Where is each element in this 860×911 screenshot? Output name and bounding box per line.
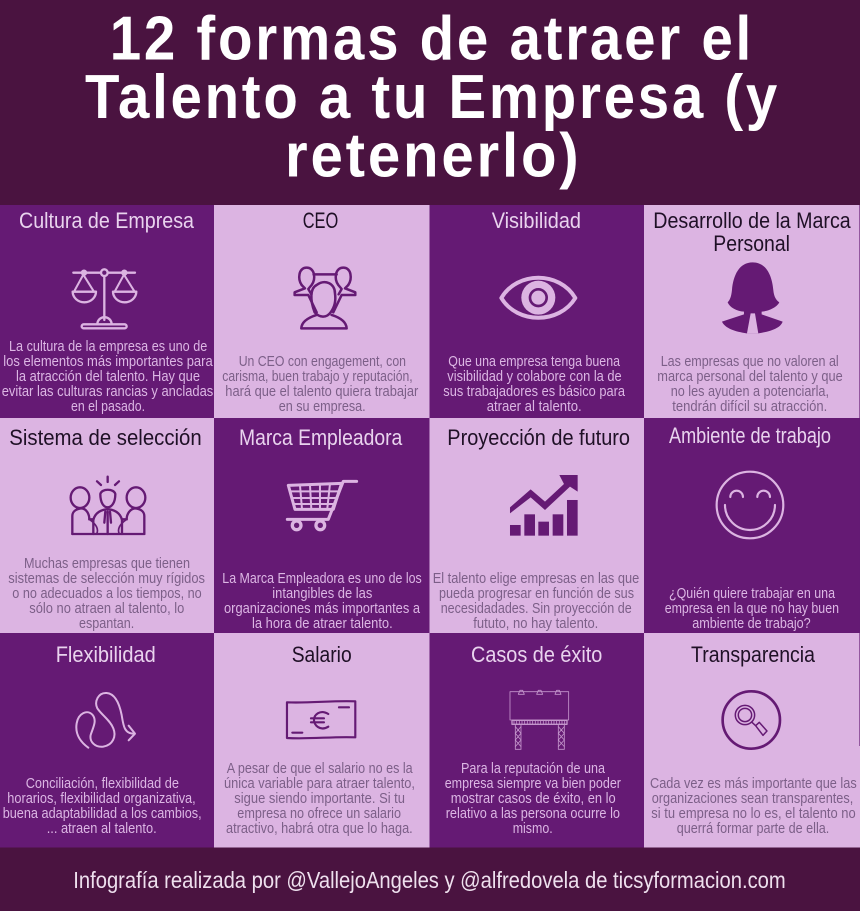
panel: Salario bbox=[214, 633, 430, 848]
icon: euro banknote bbox=[287, 701, 355, 738]
panel: Transparencia bbox=[644, 633, 860, 848]
panel: Ambiente de trabajo bbox=[644, 418, 860, 633]
body text: o no adecuados a los tiempos, no bbox=[12, 585, 202, 602]
heading: Proyección de futuro bbox=[447, 425, 630, 450]
body text: no les ayuden a potenciarla, bbox=[671, 383, 829, 400]
body text: El talento elige empresas en las que bbox=[433, 570, 639, 587]
body text bbox=[657, 353, 843, 415]
heading bbox=[653, 208, 851, 256]
body text: sistemas de selección muy rígidos bbox=[8, 570, 205, 587]
body text bbox=[8, 555, 205, 632]
heading: Personal bbox=[713, 231, 790, 256]
body text: intangibles de las bbox=[272, 585, 372, 602]
icon: billboard bbox=[510, 690, 569, 749]
body text bbox=[222, 353, 418, 415]
heading: Salario bbox=[292, 642, 352, 667]
body text: empresa siempre va bien poder bbox=[445, 775, 621, 792]
body text bbox=[443, 353, 626, 415]
title: 12 formas de atraer el bbox=[110, 4, 754, 74]
panel: Proyección de futuro bbox=[430, 418, 644, 633]
body text: Que una empresa tenga buena bbox=[448, 353, 621, 370]
body text: la atracción del talento. Hay que bbox=[16, 368, 200, 385]
panel: Sistema de selección bbox=[0, 418, 214, 633]
body text: mostrar casos de éxito, en lo bbox=[451, 790, 616, 807]
heading: Sistema de selección bbox=[9, 425, 202, 450]
body text: La Marca Empleadora es uno de los bbox=[222, 570, 422, 587]
body text: Un CEO con engagement, con bbox=[239, 353, 406, 370]
icon: eye bbox=[501, 278, 575, 318]
title: Talento a tu Empresa (y bbox=[85, 63, 780, 132]
icon: magnifier in circle bbox=[723, 691, 780, 749]
body text: hará que el talento quiera trabajar bbox=[225, 383, 418, 400]
icon: woman silhouette bbox=[722, 262, 783, 333]
body text: ambiente de trabajo? bbox=[692, 615, 811, 632]
heading: Marca Empleadora bbox=[239, 425, 403, 450]
icon: shopping cart bbox=[287, 481, 357, 530]
body text: sigue siendo importante. Si tu bbox=[234, 790, 405, 807]
icon: selection team bbox=[71, 477, 145, 534]
panel: Marca Empleadora bbox=[214, 418, 430, 633]
body text bbox=[665, 585, 839, 632]
title bbox=[85, 4, 780, 191]
body text bbox=[650, 775, 857, 837]
body text: mismo. bbox=[513, 820, 553, 837]
body text bbox=[222, 570, 422, 632]
heading: CEO bbox=[303, 208, 338, 233]
body text: visibilidad y colabore con la de bbox=[447, 368, 622, 385]
body text bbox=[224, 760, 415, 837]
body text: Para la reputación de una bbox=[461, 760, 606, 777]
heading: Flexibilidad bbox=[56, 642, 156, 667]
body text: los elementos más importantes para bbox=[3, 353, 213, 370]
body text: sólo no atraen al talento, lo bbox=[29, 600, 184, 617]
heading: Ambiente de trabajo bbox=[669, 423, 831, 448]
body text: relativo a las persona ocurre lo bbox=[446, 805, 620, 822]
body text: carisma, buen trabajo y reputación, bbox=[222, 368, 413, 385]
panel: Cultura de Empresa bbox=[0, 205, 214, 418]
body text: en su empresa. bbox=[279, 398, 366, 415]
body text: necesidadades. Sin proyección de bbox=[441, 600, 632, 617]
body text: la hora de atraer talento. bbox=[252, 615, 393, 632]
body text: fututo, no hay talento. bbox=[473, 615, 598, 632]
panel: Visibilidad bbox=[430, 205, 644, 418]
heading: Transparencia bbox=[691, 642, 816, 667]
body text: organizaciones más importantes a bbox=[224, 600, 421, 617]
body text: ... atraen al talento. bbox=[47, 820, 157, 837]
icon: growth chart bbox=[510, 475, 578, 536]
body text: querrá formar parte de ella. bbox=[677, 820, 829, 837]
body text: sus trabajadores es básico para bbox=[443, 383, 626, 400]
title: retenerlo) bbox=[285, 122, 582, 191]
body text: Muchas empresas que tienen bbox=[24, 555, 190, 572]
body text: pueda progresar en función de sus bbox=[439, 585, 634, 602]
body text bbox=[3, 775, 202, 837]
panel: CEO bbox=[214, 205, 430, 418]
icon: smiley bbox=[717, 472, 783, 538]
body text: La cultura de la empresa es uno de bbox=[9, 338, 207, 355]
body text bbox=[2, 338, 213, 415]
icon: scales bbox=[73, 269, 136, 328]
body text: buena adaptabilidad a los cambios, bbox=[3, 805, 202, 822]
body text: A pesar de que el salario no es la bbox=[227, 760, 413, 777]
panel: Casos de éxito bbox=[430, 633, 644, 848]
panel: Desarrollo de la Marca Personal bbox=[644, 205, 860, 418]
heading: Cultura de Empresa bbox=[19, 208, 195, 233]
body text: Conciliación, flexibilidad de bbox=[26, 775, 179, 792]
body text bbox=[433, 570, 639, 632]
body text: atraer al talento. bbox=[487, 398, 582, 415]
body text bbox=[445, 760, 621, 837]
body text: empresa no ofrece un salario bbox=[237, 805, 401, 822]
heading: Visibilidad bbox=[492, 208, 581, 233]
body text: única variable para atraer talento, bbox=[224, 775, 415, 792]
icon: winding arrow bbox=[76, 693, 135, 748]
heading: Casos de éxito bbox=[471, 642, 602, 667]
body text: evitar las culturas rancias y ancladas bbox=[2, 383, 213, 400]
body text: tendrán difícil su atracción. bbox=[672, 398, 827, 415]
panel: Flexibilidad bbox=[0, 633, 214, 848]
icon: CEO with colleagues bbox=[295, 268, 355, 328]
body text: espantan. bbox=[79, 615, 134, 632]
body text: en el pasado. bbox=[71, 398, 145, 415]
body text: atractivo, habrá otra que lo haga. bbox=[226, 820, 413, 837]
body text: horarios, flexibilidad organizativa, bbox=[7, 790, 196, 807]
